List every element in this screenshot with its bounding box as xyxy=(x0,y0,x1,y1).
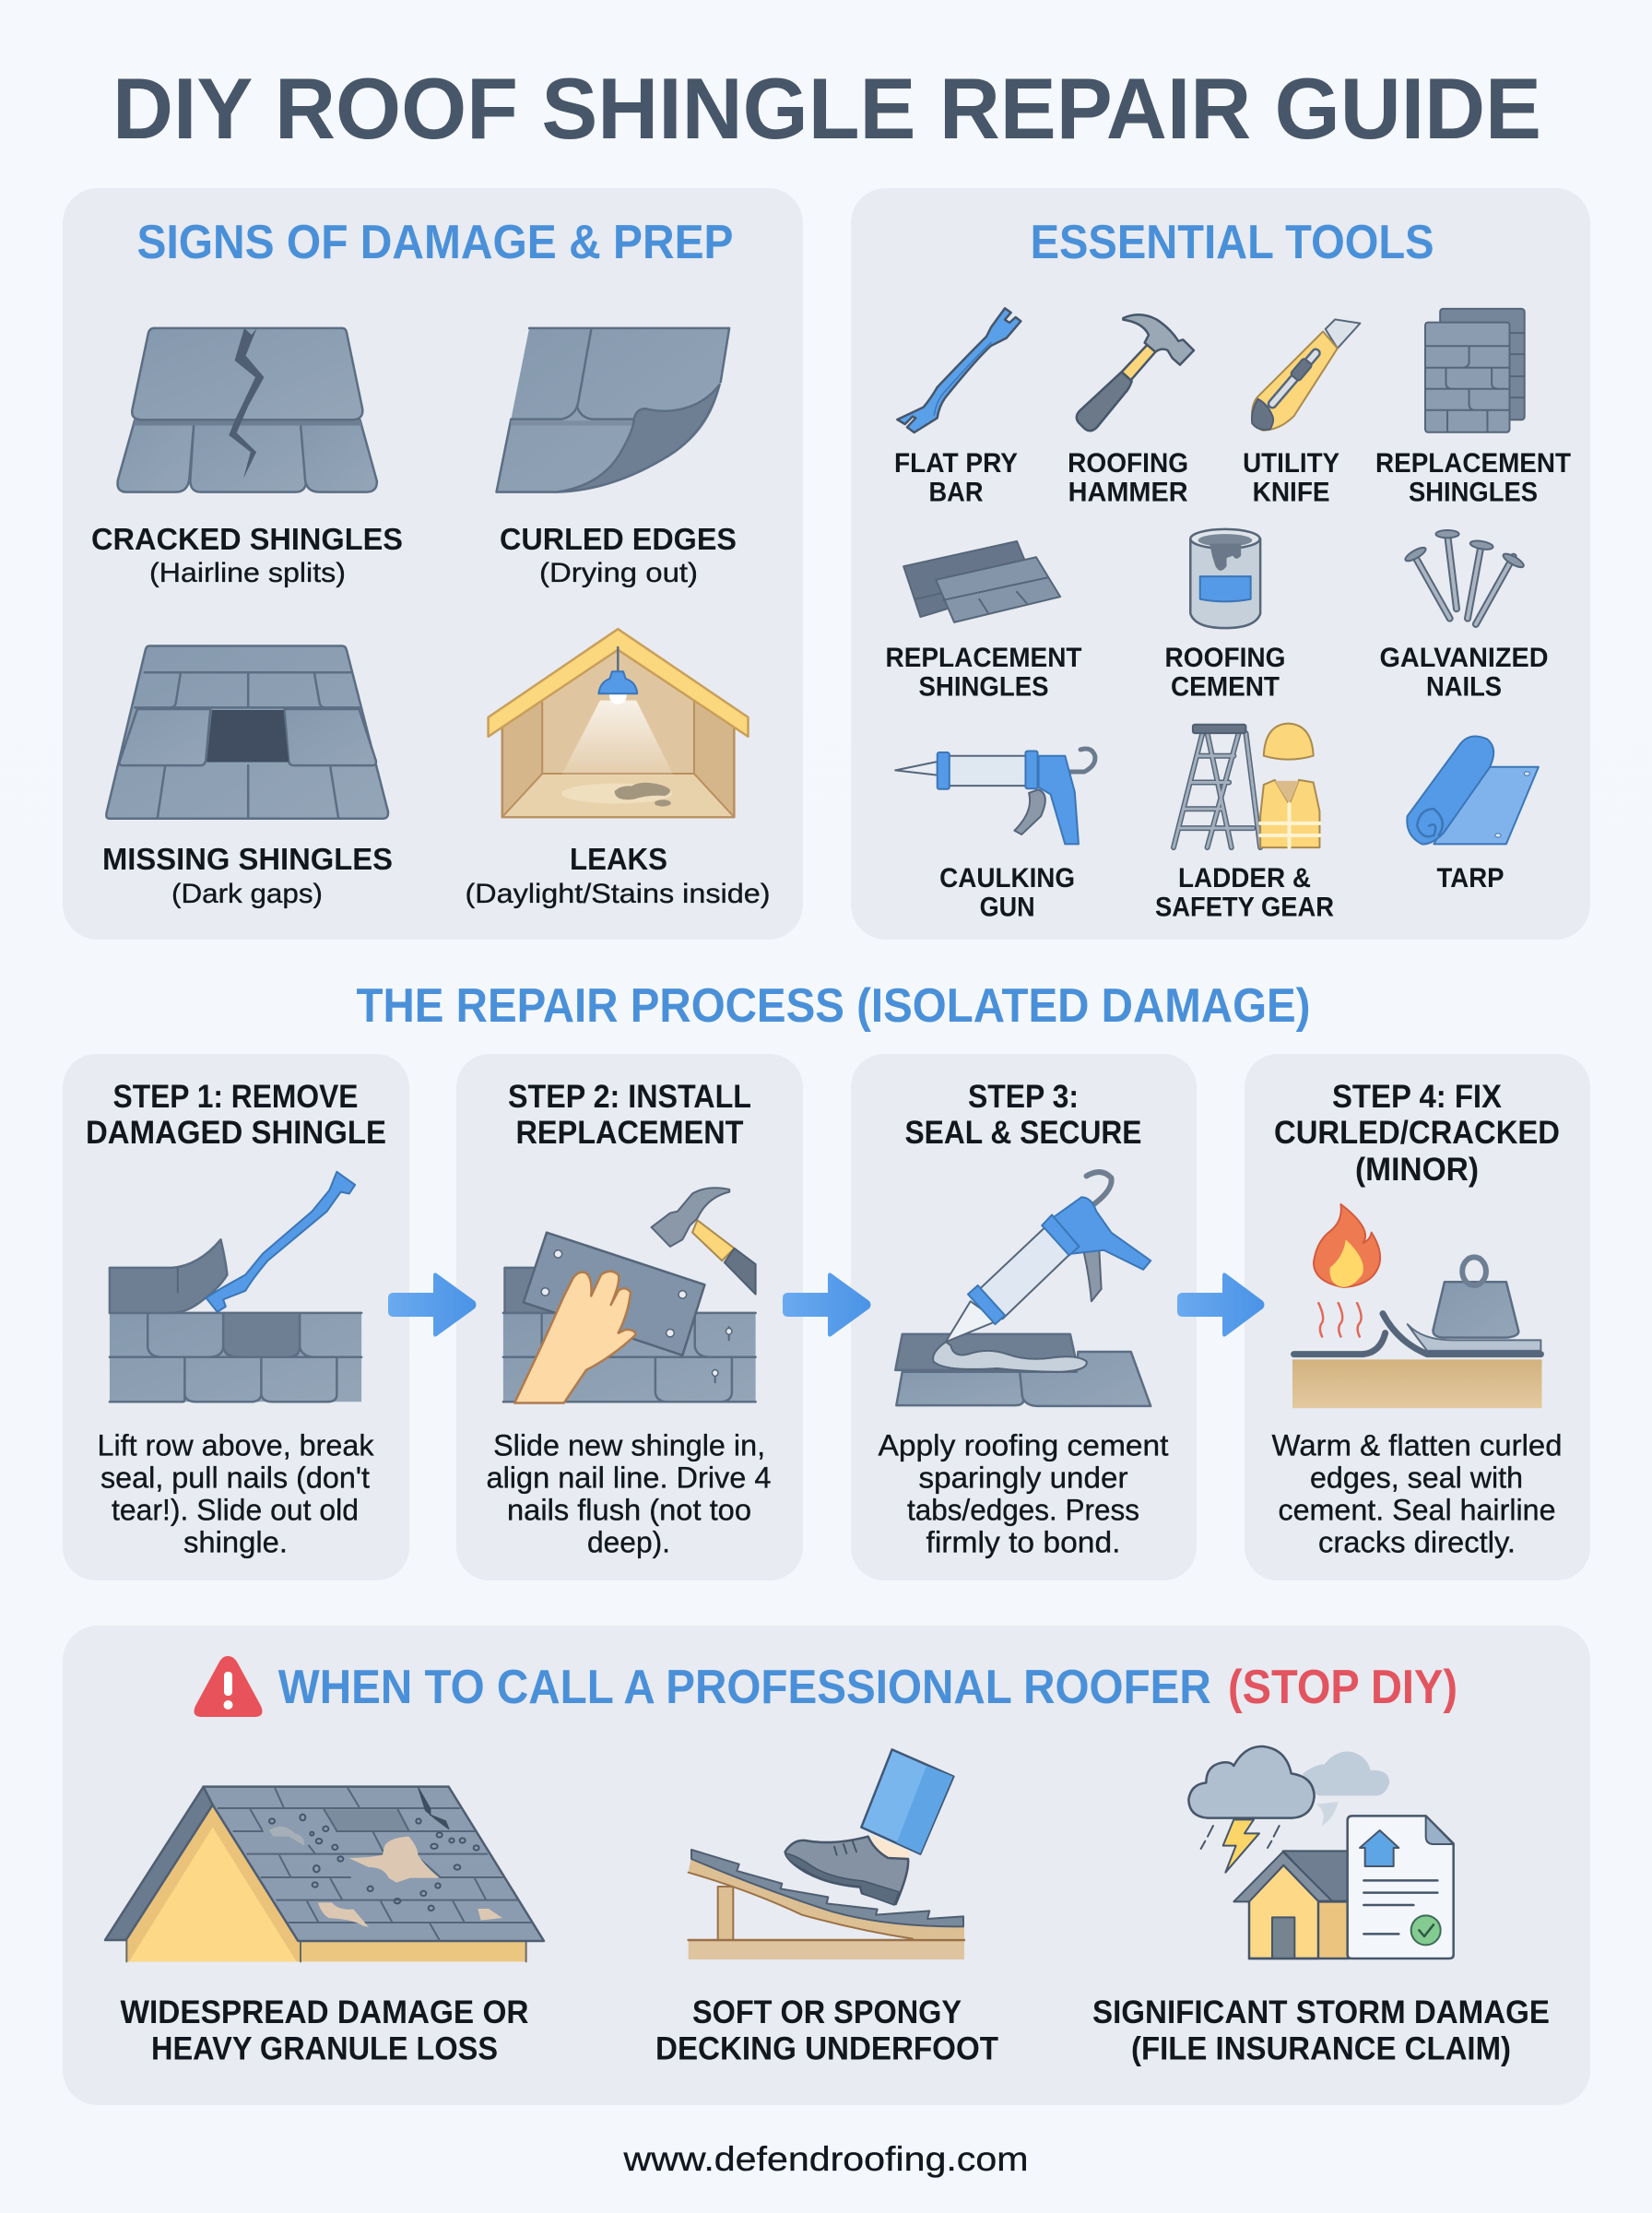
icon: damaged roof xyxy=(105,1787,544,1961)
icon: cracked shingles xyxy=(118,328,377,492)
label: roofing hammer xyxy=(1068,448,1188,508)
icon: replacement shingles stack xyxy=(1425,309,1525,432)
label: flat pry bar xyxy=(894,448,1018,508)
label: missing shingles: (Dark gaps) xyxy=(171,879,323,909)
heading: step 4 xyxy=(1274,1079,1560,1188)
text: step 4 body: Warm & flatten curled xyxy=(1272,1429,1562,1462)
label: widespread damage: HEAVY GRANULE LOSS xyxy=(151,2030,498,2067)
icon: caulking gun xyxy=(895,749,1095,844)
label: replacement shingles second: SHINGLES xyxy=(918,671,1049,702)
icon: roofing hammer xyxy=(1077,314,1194,431)
label: significant storm damage xyxy=(1092,1994,1550,2067)
label: replacement shingles second xyxy=(885,643,1082,702)
label: caulking gun xyxy=(939,863,1075,922)
text: step 4 body xyxy=(1272,1429,1562,1558)
arrow: step 3 to 4 xyxy=(1177,1272,1265,1337)
text: step 2 body: deep). xyxy=(587,1525,670,1558)
label: soft or spongy decking xyxy=(655,1994,998,2067)
icon: storm, house and claim document xyxy=(1188,1746,1454,1959)
icon: replacement shingles flat xyxy=(903,541,1060,622)
heading: the repair process: THE REPAIR PROCESS (ISOLATED DAMAGE) xyxy=(356,979,1311,1033)
icon: leaks xyxy=(489,629,748,817)
label: significant storm damage: SIGNIFICANT STORM DAMAGE xyxy=(1092,1994,1550,2030)
heading: step 2: STEP 2: INSTALL xyxy=(508,1079,751,1115)
label: curled edges: (Drying out) xyxy=(539,558,698,588)
label: widespread damage: WIDESPREAD DAMAGE OR xyxy=(120,1994,529,2030)
icon: caulking shingle xyxy=(895,1172,1150,1406)
icon: installing shingle xyxy=(503,1188,756,1402)
icon: foot on spongy decking xyxy=(689,1749,964,1959)
text: step 4 body: cement. Seal hairline xyxy=(1278,1494,1556,1527)
text: step 2 body: Slide new shingle in, xyxy=(493,1429,765,1462)
label: caulking gun: CAULKING xyxy=(939,863,1075,893)
label: curled edges: CURLED EDGES xyxy=(500,522,737,556)
label: leaks: (Daylight/Stains inside) xyxy=(465,879,771,909)
label: replacement shingles top xyxy=(1375,448,1571,508)
heading: step 1 xyxy=(86,1079,386,1151)
label: leaks xyxy=(465,842,771,909)
label: roofing cement xyxy=(1165,643,1285,702)
panel: step 2 xyxy=(456,1054,803,1580)
label: cracked shingles xyxy=(91,522,403,588)
label: galvanized nails xyxy=(1379,643,1549,702)
label: tarp: TARP xyxy=(1436,863,1504,893)
label: ladder and safety gear: SAFETY GEAR xyxy=(1155,892,1334,922)
label: galvanized nails: GALVANIZED xyxy=(1379,643,1549,673)
panel: signs of damage and prep xyxy=(63,188,803,940)
icon: warning triangle xyxy=(195,1656,262,1717)
label: roofing cement: ROOFING xyxy=(1165,643,1285,673)
label: flat pry bar: BAR xyxy=(929,478,984,508)
label: roofing hammer: HAMMER xyxy=(1068,478,1188,508)
icon: flat pry bar xyxy=(897,308,1021,432)
heading: step 1: STEP 1: REMOVE xyxy=(112,1079,358,1115)
heading: when to call: WHEN TO CALL A PROFESSIONAL ROOFER xyxy=(278,1661,1211,1714)
label: utility knife: UTILITY xyxy=(1243,448,1339,479)
icon: curled edges xyxy=(497,328,729,492)
label: curled edges xyxy=(500,522,737,588)
heading: step 3: SEAL & SECURE xyxy=(905,1115,1141,1151)
label: widespread damage xyxy=(120,1994,529,2067)
icon: galvanized nails xyxy=(1404,530,1526,624)
icon: prying shingle xyxy=(110,1172,361,1402)
text: step 1 body xyxy=(98,1429,375,1558)
label: missing shingles: MISSING SHINGLES xyxy=(102,842,393,876)
label: galvanized nails: NAILS xyxy=(1426,671,1502,702)
heading: step 2: REPLACEMENT xyxy=(516,1115,743,1151)
label: replacement shingles top: REPLACEMENT xyxy=(1375,448,1571,479)
text: step 4 body: cracks directly. xyxy=(1318,1525,1516,1558)
footer url: www.defendroofing.com xyxy=(622,2140,1029,2178)
label: soft or spongy decking: SOFT OR SPONGY xyxy=(692,1994,962,2030)
label: ladder and safety gear xyxy=(1155,863,1334,922)
text: step 3 body: tabs/edges. Press xyxy=(907,1494,1139,1527)
text: step 3 body xyxy=(878,1429,1169,1558)
label: cracked shingles: (Hairline splits) xyxy=(149,558,346,588)
label: replacement shingles second: REPLACEMENT xyxy=(885,643,1082,673)
text: step 2 body: nails flush (not too xyxy=(507,1494,751,1527)
heading: step 3 xyxy=(905,1079,1141,1151)
label: roofing hammer: ROOFING xyxy=(1068,448,1188,479)
text: step 4 body: edges, seal with xyxy=(1310,1461,1523,1494)
text: step 1 body: tear!). Slide out old xyxy=(112,1494,359,1527)
label: soft or spongy decking: DECKING UNDERFOOT xyxy=(655,2030,998,2067)
text: step 1 body: shingle. xyxy=(183,1525,288,1558)
heading: step 4: (MINOR) xyxy=(1355,1152,1479,1188)
label: caulking gun: GUN xyxy=(980,892,1035,922)
arrow: step 2 to 3 xyxy=(783,1272,870,1337)
panel: when to call a professional xyxy=(63,1626,1590,2105)
text: step 2 body xyxy=(487,1429,771,1558)
panel: step 1 xyxy=(63,1054,409,1580)
label: flat pry bar: FLAT PRY xyxy=(894,448,1018,479)
label: missing shingles xyxy=(102,842,393,909)
label: roofing cement: CEMENT xyxy=(1171,671,1280,702)
heading: step 4: STEP 4: FIX xyxy=(1332,1079,1503,1115)
icon: utility knife xyxy=(1252,319,1360,431)
icon: missing shingles xyxy=(106,645,388,819)
icon: ladder and safety gear xyxy=(1174,724,1319,847)
icon: roofing cement can xyxy=(1190,529,1260,628)
text: step 3 body: Apply roofing cement xyxy=(878,1429,1169,1462)
heading: step 2 xyxy=(508,1079,751,1151)
label: significant storm damage: (FILE INSURANCE CLAIM) xyxy=(1131,2030,1511,2067)
panel: step 3 xyxy=(851,1054,1197,1580)
icon: flame, weight and curled shingle xyxy=(1292,1204,1541,1408)
text: step 1 body: Lift row above, break xyxy=(98,1429,375,1462)
text: step 3 body: firmly to bond. xyxy=(926,1525,1121,1558)
heading: signs of damage: SIGNS OF DAMAGE & PREP xyxy=(136,216,734,269)
heading: when to call: (STOP DIY) xyxy=(1228,1661,1457,1714)
text: step 2 body: align nail line. Drive 4 xyxy=(487,1461,771,1494)
label: replacement shingles top: SHINGLES xyxy=(1409,478,1538,508)
panel: step 4 xyxy=(1245,1054,1590,1580)
heading: step 3: STEP 3: xyxy=(968,1079,1079,1115)
label: cracked shingles: CRACKED SHINGLES xyxy=(91,522,403,556)
heading: step 1: DAMAGED SHINGLE xyxy=(86,1115,386,1151)
icon: tarp xyxy=(1407,736,1539,844)
heading: step 4: CURLED/CRACKED xyxy=(1274,1115,1560,1151)
arrow: step 1 to 2 xyxy=(388,1272,476,1337)
heading: essential tools: ESSENTIAL TOOLS xyxy=(1031,216,1434,269)
text: step 3 body: sparingly under xyxy=(918,1461,1128,1494)
label: ladder and safety gear: LADDER & xyxy=(1178,863,1311,893)
label: utility knife: KNIFE xyxy=(1253,478,1330,508)
panel: essential tools xyxy=(851,188,1590,940)
label: utility knife xyxy=(1243,448,1339,508)
title: DIY ROOF SHINGLE REPAIR GUIDE xyxy=(112,60,1541,157)
text: step 1 body: seal, pull nails (don't xyxy=(100,1461,370,1494)
label: leaks: LEAKS xyxy=(570,842,667,876)
